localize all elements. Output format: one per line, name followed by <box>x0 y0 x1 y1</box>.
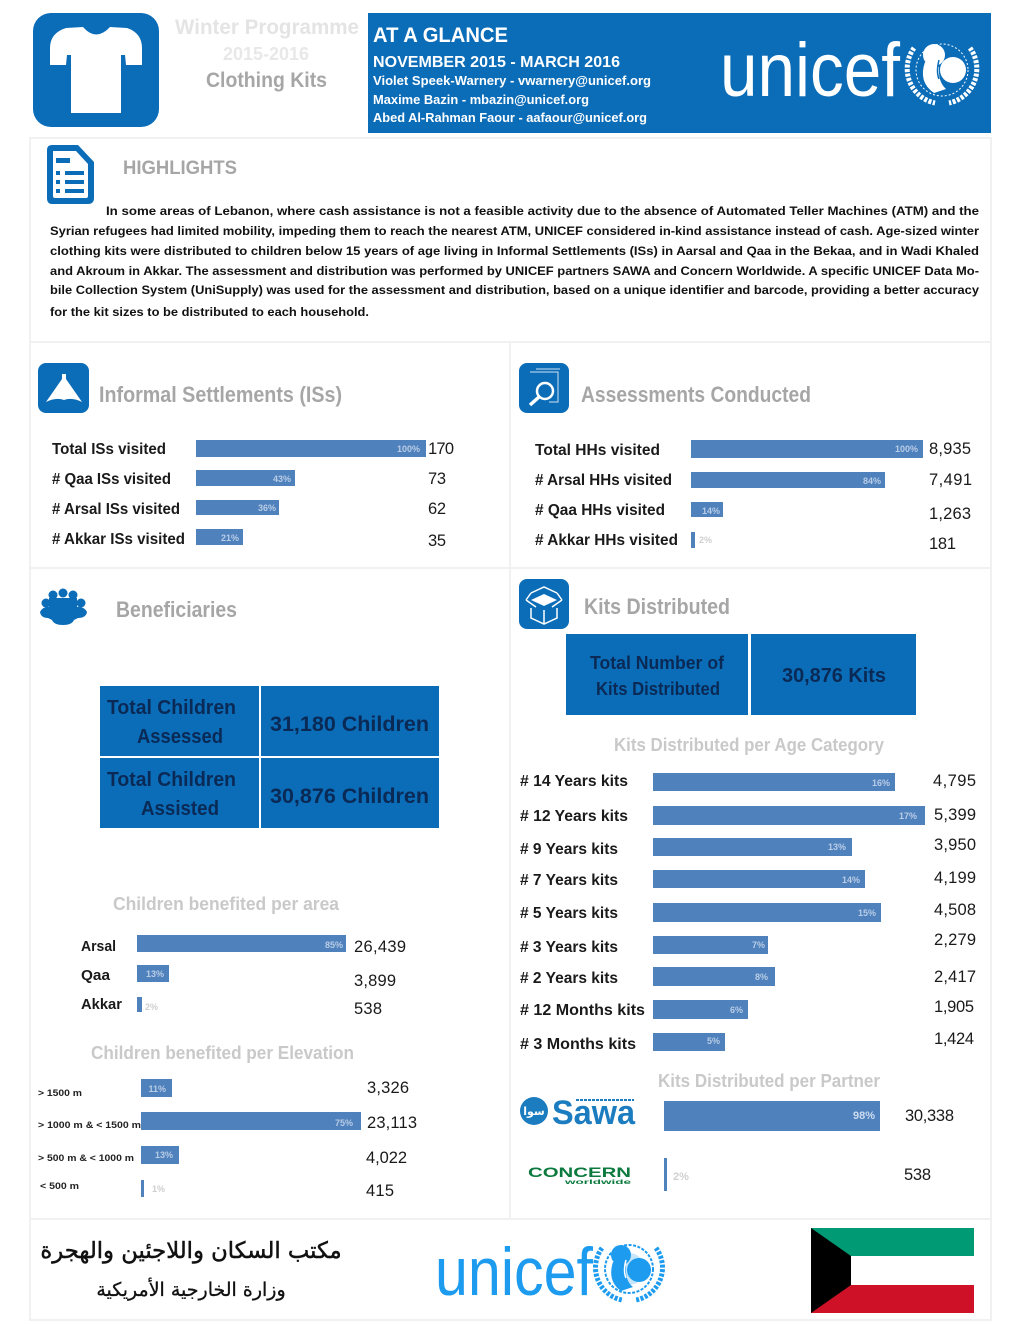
bar chart: children per elevation: > 1500 m <box>38 1088 82 1098</box>
bar chart: children per elevation: 3,326 <box>367 1079 409 1097</box>
bar chart: kits per age category: 1,424 <box>934 1030 974 1048</box>
bar chart: settlements visited: Total ISs visited <box>52 441 166 458</box>
programme title <box>175 16 359 92</box>
panel: beneficiaries <box>38 588 439 1200</box>
icon: shirt <box>33 13 159 127</box>
bar chart: children per elevation: > 500 m & < 1000 m <box>38 1153 134 1163</box>
highlights text block: Syrian refugees had limited mobility, impeding them to reach the nearest ATM, UNICEF considered in-kind assistance instead of cash. Age-sized winter <box>50 226 980 238</box>
bar chart: children per area: 2% <box>145 1002 158 1012</box>
bar chart: children per area: Qaa <box>81 968 111 984</box>
bar chart: children per area: 13% <box>146 969 164 979</box>
panel: assessments conducted <box>519 363 972 553</box>
bar: sawa: 30,338 <box>905 1107 954 1125</box>
bar chart: children per elevation: 11% <box>148 1084 166 1094</box>
bar chart: households visited <box>535 440 972 553</box>
bar chart: households visited: 14% <box>702 506 720 516</box>
bar chart: settlements visited: 73 <box>428 470 446 488</box>
bar chart: children per elevation: > 1000 m & < 1500 m <box>38 1120 141 1130</box>
summary table: kits: 30,876 Kits <box>782 665 886 687</box>
bar chart: settlements visited: 36% <box>258 503 276 513</box>
summary table: children <box>100 686 439 828</box>
bar chart: kits per age category: 13% <box>828 842 846 852</box>
bar chart: kits per age category: 3,950 <box>934 836 976 854</box>
bar chart: kits per age category: 4,508 <box>934 901 976 919</box>
bar chart: children per elevation: 1% <box>152 1184 165 1194</box>
bar chart: kits per age category: # 9 Years kits <box>520 841 618 858</box>
bar chart: settlements visited: 35 <box>428 532 446 550</box>
heading: kits per partner: Kits Distributed per Partner <box>658 1071 880 1091</box>
icon: document <box>47 145 94 204</box>
flag: kuwait <box>811 1228 974 1313</box>
donor name in arabic: وزارة الخارجية الأمريكية <box>96 1278 286 1301</box>
donor name in arabic <box>40 1238 342 1301</box>
icon: tent <box>38 363 89 413</box>
bar chart: households visited: 181 <box>929 535 956 553</box>
heading: kits distributed: Kits Distributed <box>584 594 730 619</box>
bar chart: households visited: 1,263 <box>929 505 971 523</box>
bar chart: kits per age category: # 3 Years kits <box>520 939 618 956</box>
footer: donors and partners <box>40 1228 974 1313</box>
logo: concern worldwide <box>528 1164 632 1186</box>
summary table: children: 31,180 Children <box>270 713 429 736</box>
highlights text block: clothing kits were distributed to children below 15 years of age living in Informal Settlements (ISs) in Aarsal and Qaa in the Bekaa, and in Wadi Khaled <box>50 246 979 258</box>
bar chart: settlements visited: 100% <box>397 444 420 454</box>
heading: highlights: HIGHLIGHTS <box>123 157 237 179</box>
bar chart: households visited: # Qaa HHs visited <box>535 502 665 519</box>
panel: kits distributed <box>519 579 976 1191</box>
highlights text block: for the kit sizes to be distributed to each household. <box>50 307 369 319</box>
summary table: children: Assessed <box>137 726 223 748</box>
bar chart: households visited: # Akkar HHs visited <box>535 532 678 549</box>
summary table: kits <box>566 634 916 715</box>
header banner: at a glance: NOVEMBER 2015 - MARCH 2016 <box>373 54 620 71</box>
logo: sawa: Sawa <box>552 1094 636 1132</box>
bar chart: households visited: Total HHs visited <box>535 442 660 459</box>
bar: sawa <box>664 1101 954 1131</box>
heading: children per elevation: Children benefited per Elevation <box>91 1043 354 1063</box>
bar chart: kits per age category: 5% <box>707 1036 720 1046</box>
bar chart: kits per age category: 2,279 <box>934 931 976 949</box>
bar chart: kits per age category: # 3 Months kits <box>520 1036 636 1053</box>
icon: open box <box>519 579 569 629</box>
bar chart: kits per age category: 16% <box>872 778 890 788</box>
summary table: kits: Kits Distributed <box>596 678 720 699</box>
header banner: at a glance: Violet Speek-Warnery - vwarnery@unicef.org <box>373 74 651 88</box>
bar chart: households visited: 100% <box>895 444 918 454</box>
header banner: at a glance: AT A GLANCE <box>373 24 508 47</box>
bar chart: children per elevation: 13% <box>155 1150 173 1160</box>
bar chart: children per elevation: 4,022 <box>366 1149 407 1167</box>
bar chart: children per area: 26,439 <box>354 938 406 956</box>
heading: informal settlements: Informal Settlements (ISs) <box>99 382 342 407</box>
bar chart: settlements visited: # Akkar ISs visited <box>52 531 185 548</box>
programme title: Winter Programme <box>175 16 359 39</box>
bar chart: kits per age category: 4,795 <box>933 772 976 790</box>
panel: highlights <box>47 145 980 319</box>
bar chart: households visited: 8,935 <box>929 440 971 458</box>
icon: people group <box>40 588 87 625</box>
bar chart: households visited: 7,491 <box>929 471 972 489</box>
highlights text block: and Akroum in Akkar. The assessment and distribution was performed by UNICEF partners SAWA and Concern Worldwide. A specific UNICEF Data Mo- <box>50 266 979 278</box>
bar chart: kits per age category: 14% <box>842 875 860 885</box>
highlights text block: In some areas of Lebanon, where cash assistance is not a feasible activity due to the absence of Automated Teller Machines (ATM) and the <box>106 206 979 218</box>
summary table: children: Total Children <box>107 769 236 791</box>
bar chart: children per elevation <box>38 1079 417 1200</box>
highlights text block: bile Collection System (UniSupply) was used for the assessment and distribution, based on a unique identifier and barcode, providing a better accuracy <box>50 285 980 297</box>
summary table: kits: Total Number of <box>590 652 725 673</box>
bar chart: kits per age category: # 14 Years kits <box>520 773 628 790</box>
bar chart: kits per age category: 5,399 <box>934 806 976 824</box>
bar chart: settlements visited: 170 <box>428 440 454 458</box>
bar chart: settlements visited: # Qaa ISs visited <box>52 471 171 488</box>
heading: kits per age category: Kits Distributed per Age Category <box>614 735 884 755</box>
bar chart: children per area: 3,899 <box>354 972 396 990</box>
logo: concern worldwide: worldwide <box>563 1179 632 1186</box>
bar: concern: 538 <box>904 1166 931 1184</box>
bar chart: households visited: # Arsal HHs visited <box>535 472 672 489</box>
bar chart: kits per age category: # 12 Months kits <box>520 1002 645 1019</box>
bar chart: kits per age category: 1,905 <box>934 998 974 1016</box>
heading: children per area: Children benefited per area <box>113 894 340 914</box>
bar chart: settlements visited: 43% <box>273 474 291 484</box>
programme title: 2015-2016 <box>223 44 309 64</box>
bar: concern: 2% <box>673 1171 689 1183</box>
panel: informal settlements <box>38 363 454 550</box>
bar chart: kits per age category: # 2 Years kits <box>520 970 618 987</box>
header banner: at a glance: unicef <box>720 28 901 113</box>
bar chart: households visited: 2% <box>699 535 712 545</box>
bar chart: kits per age category: 7% <box>752 940 765 950</box>
bar chart: kits per age category: 2,417 <box>934 968 976 986</box>
bar: sawa: 98% <box>853 1110 875 1122</box>
header banner: at a glance <box>368 13 991 133</box>
bar chart: settlements visited: # Arsal ISs visited <box>52 501 180 518</box>
bar chart: children per area: 85% <box>325 940 343 950</box>
bar chart: children per elevation: 75% <box>335 1118 353 1128</box>
bar chart: kits per age category: 8% <box>755 972 768 982</box>
highlights text block <box>50 206 980 319</box>
bar chart: children per area: Akkar <box>81 997 122 1013</box>
bar chart: settlements visited: 62 <box>428 500 446 518</box>
donor name in arabic: مكتب السكان واللاجئين والهجرة <box>40 1238 342 1264</box>
summary table: children: Total Children <box>107 697 236 719</box>
logo: concern worldwide: CONCERN <box>528 1164 631 1180</box>
bar chart: kits per age category: # 5 Years kits <box>520 905 618 922</box>
bar chart: kits per age category: 17% <box>899 811 917 821</box>
logo: sawa: سوا <box>523 1105 545 1118</box>
heading: assessments conducted: Assessments Conducted <box>581 382 811 407</box>
bar chart: settlements visited: 21% <box>221 533 239 543</box>
bar chart: children per elevation: 415 <box>366 1182 394 1200</box>
bar chart: households visited: 84% <box>863 476 881 486</box>
header banner: at a glance: Abed Al-Rahman Faour - aafaour@unicef.org <box>373 111 647 125</box>
bar: concern <box>664 1158 931 1191</box>
bar chart: kits per age category: # 7 Years kits <box>520 872 618 889</box>
bar chart: kits per age category: # 12 Years kits <box>520 808 628 825</box>
heading: beneficiaries: Beneficiaries <box>116 597 237 622</box>
header banner: at a glance: Maxime Bazin - mbazin@unicef.org <box>373 93 589 107</box>
bar chart: settlements visited <box>52 440 454 550</box>
icon: magnifier on documents <box>519 363 569 413</box>
bar chart: children per area <box>81 935 406 1018</box>
bar chart: children per elevation: < 500 m <box>40 1181 79 1191</box>
bar chart: kits per age category: 4,199 <box>934 869 976 887</box>
summary table: children: Assisted <box>141 798 219 820</box>
bar chart: kits per age category: 15% <box>858 908 876 918</box>
bar chart: kits per age category: 6% <box>730 1005 743 1015</box>
bar chart: children per area: 538 <box>354 1000 382 1018</box>
bar chart: kits per age category <box>520 772 976 1053</box>
programme title: Clothing Kits <box>206 69 327 92</box>
logo: unicef: unicef <box>435 1234 593 1310</box>
summary table: children: 30,876 Children <box>270 785 429 808</box>
bar chart: children per elevation: 23,113 <box>367 1114 417 1132</box>
bar chart: children per area: Arsal <box>81 939 116 955</box>
